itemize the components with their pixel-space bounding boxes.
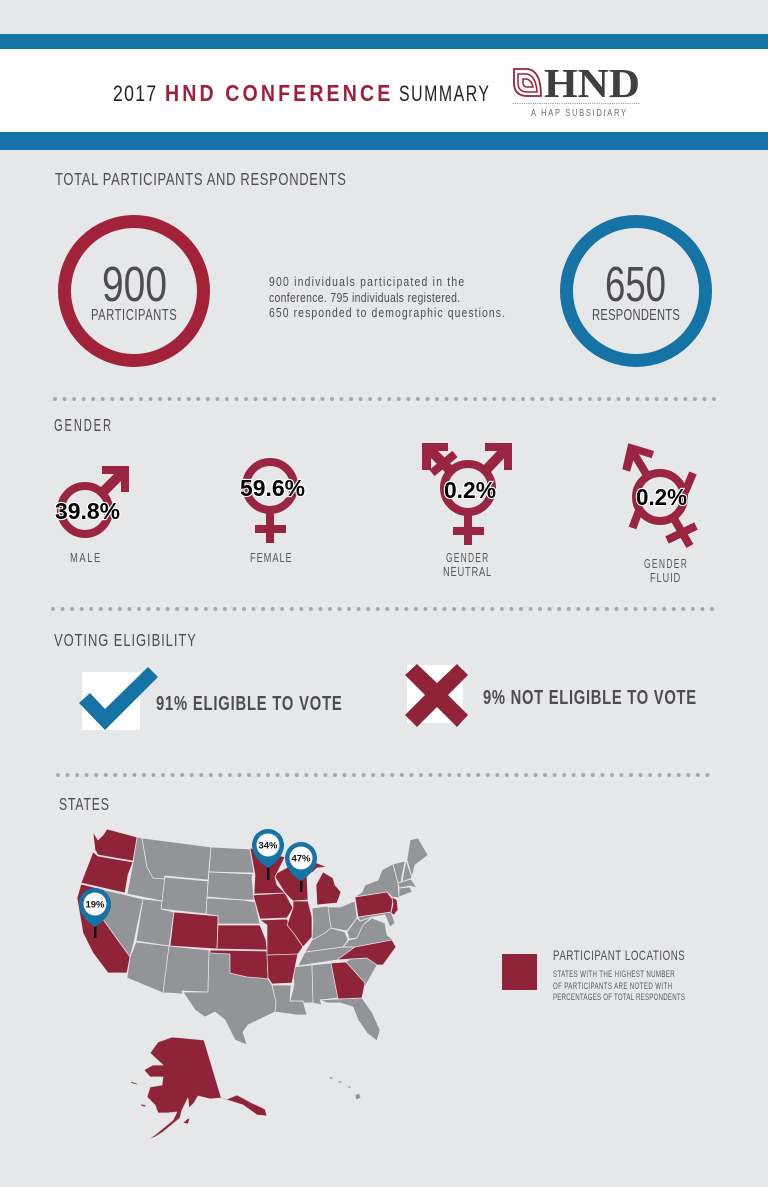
gender neutral symbol (422, 443, 512, 579)
legend: OF PARTICIPANTS ARE NOTED WITH (553, 981, 672, 991)
respondents ring (566, 222, 706, 360)
legend (502, 949, 685, 1002)
heading: gender: GENDER (54, 415, 111, 436)
gender fluid symbol: 0.2% (636, 484, 687, 510)
gender neutral symbol: 0.2% (444, 477, 496, 503)
summary paragraph (269, 275, 505, 320)
heading: states: STATES (59, 795, 109, 815)
respondents ring: 650 (605, 258, 666, 312)
icon: x mark (405, 664, 468, 727)
participants ring: 900 (102, 258, 167, 312)
male symbol: MALE (70, 552, 101, 565)
gender fluid symbol: GENDER (644, 557, 687, 572)
title: SUMMARY (399, 83, 489, 107)
female symbol: 59.6% (240, 475, 305, 501)
respondents ring: RESPONDENTS (592, 306, 680, 323)
non-participant states (102, 837, 428, 1100)
logo: HND: A HAP SUBSIDIARY (531, 107, 626, 118)
map: United States (77, 829, 428, 1140)
legend: STATES WITH THE HIGHEST NUMBER (553, 969, 675, 979)
male symbol (55, 466, 129, 565)
participants ring: PARTICIPANTS (91, 306, 177, 323)
participants ring (64, 222, 204, 360)
legend: PARTICIPANT LOCATIONS (553, 949, 685, 963)
title: 2017 (113, 82, 156, 107)
summary paragraph: 900 individuals participated in the (269, 275, 465, 289)
logo: HND: HND (544, 60, 640, 106)
logo: HND (513, 60, 640, 118)
title: HND CONFERENCE (165, 81, 390, 106)
participant states (77, 829, 398, 1140)
summary paragraph: conference. 795 individuals registered. (269, 291, 460, 305)
legend: PERCENTAGES OF TOTAL RESPONDENTS (553, 992, 685, 1002)
male symbol: 39.8% (55, 498, 120, 524)
female symbol (240, 462, 305, 565)
eligible label: 91% ELIGIBLE TO VOTE (156, 692, 342, 715)
gender neutral symbol: NEUTRAL (443, 566, 491, 579)
map pin: 47% (285, 842, 317, 892)
gender fluid symbol: FLUID (650, 572, 680, 585)
map pin: 34% (252, 829, 284, 880)
title (113, 81, 489, 107)
female symbol: FEMALE (250, 552, 292, 565)
not eligible label: 9% NOT ELIGIBLE TO VOTE (483, 686, 696, 709)
gender neutral symbol: GENDER (446, 551, 488, 566)
gender fluid symbol (622, 443, 696, 585)
map pin: 47%: 47% (291, 854, 311, 864)
summary paragraph: 650 responded to demographic questions. (269, 306, 505, 320)
header banner (0, 34, 768, 150)
map pin: 19% (79, 888, 111, 938)
heading: total participants and respondents: TOTAL PARTICIPANTS AND RESPONDENTS (55, 170, 346, 190)
map pin: 34%: 34% (258, 840, 278, 852)
heading: voting eligibility: VOTING ELIGIBILITY (54, 631, 196, 651)
map pin: 19%: 19% (85, 900, 105, 910)
icon: check mark (79, 667, 158, 730)
